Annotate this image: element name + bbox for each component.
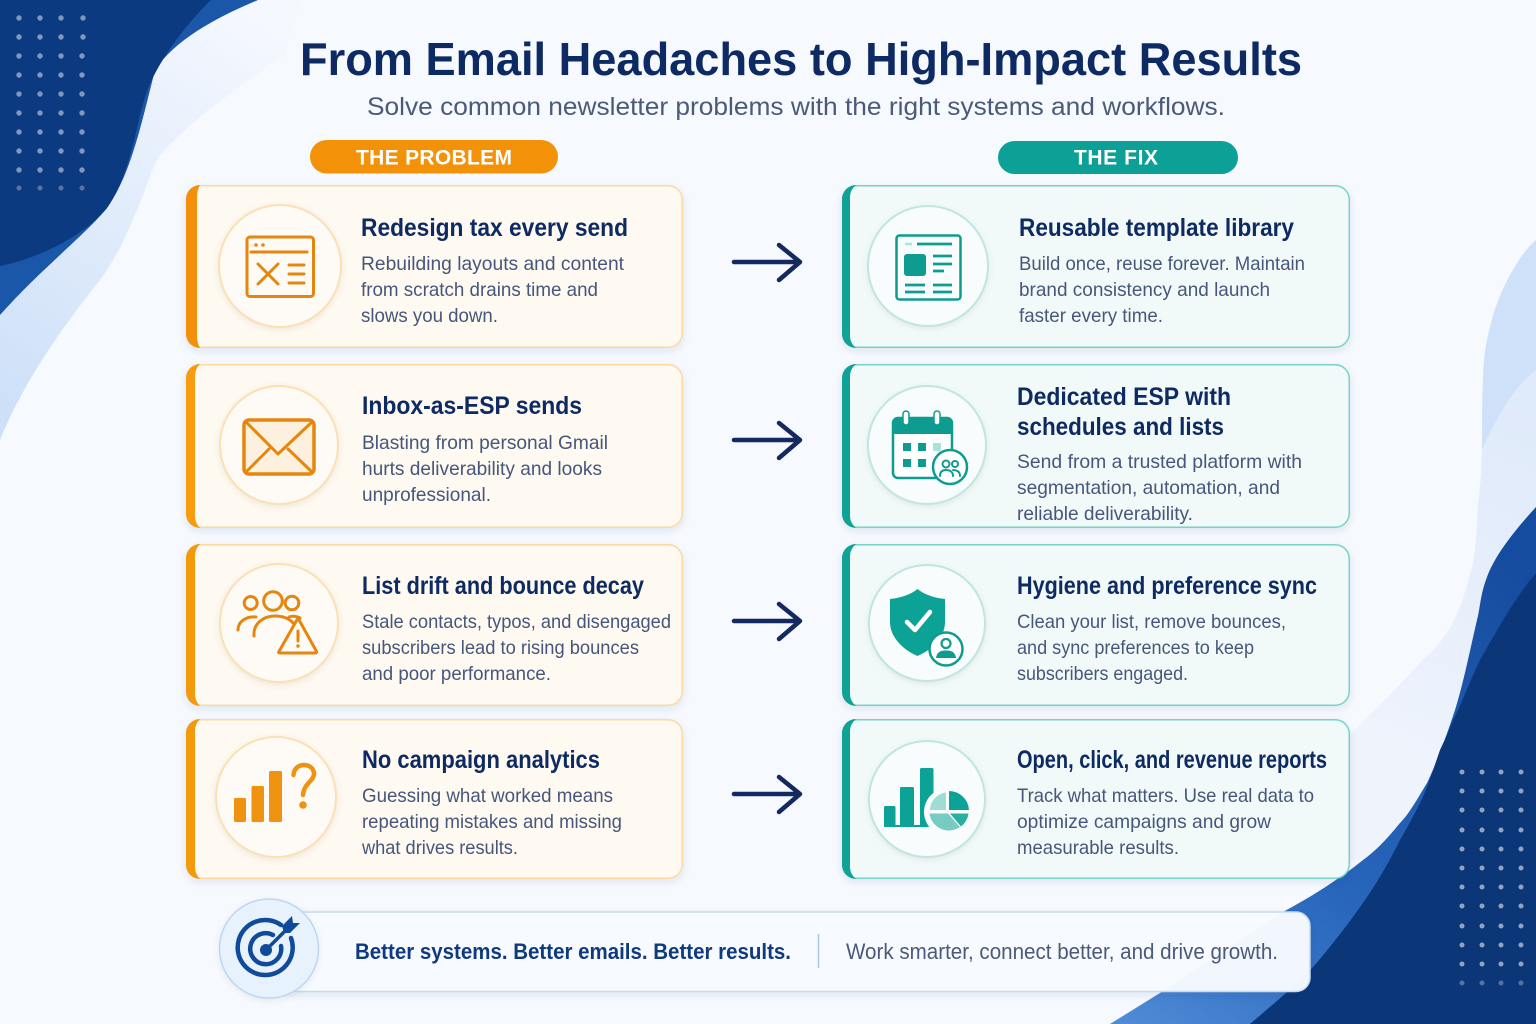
text: fix 3: and sync preferences to keep (1017, 637, 1254, 659)
text: fix 3 (1017, 572, 1317, 685)
text: problem 1: Redesign tax every send (361, 214, 628, 242)
background wave: bottom right (1110, 240, 1536, 1024)
text: fix 1: Build once, reuse forever. Maintain (1019, 253, 1305, 275)
text: problem 3: subscribers lead to rising bounces (362, 637, 639, 659)
text: problem 1: from scratch drains time and (361, 279, 598, 301)
icon: bar chart with pie (869, 741, 985, 857)
text: problem 3: List drift and bounce decay (362, 572, 644, 600)
title: From Email Headaches to High-Impact Results (300, 33, 1302, 85)
text: banner supporting line: Work smarter, connect better, and drive growth. (846, 939, 1278, 964)
icon: layout window with x (219, 205, 341, 327)
text: fix 4: measurable results. (1017, 837, 1179, 859)
panel: problem 2 (186, 364, 682, 528)
text: problem 2: Blasting from personal Gmail (362, 432, 608, 454)
text: problem 2: hurts deliverability and looks (362, 458, 602, 480)
subtitle: Solve common newsletter problems with the right systems and workflows. (367, 93, 1225, 121)
text: fix 4 (1017, 746, 1327, 859)
text: fix 2: reliable deliverability. (1017, 503, 1193, 525)
icon: calendar with people (868, 386, 986, 504)
text: problem 4: what drives results. (361, 837, 518, 859)
text: fix 3: Hygiene and preference sync (1017, 572, 1317, 600)
arrow: row 3 (734, 604, 800, 639)
text: fix 1: faster every time. (1019, 305, 1163, 327)
pill: the problem (310, 140, 558, 174)
panel: problem 1 (186, 185, 682, 348)
text: problem 4: Guessing what worked means (362, 785, 613, 807)
text: problem 2 (362, 392, 608, 506)
pill: the problem: THE PROBLEM (356, 146, 512, 170)
text: problem 1: Rebuilding layouts and content (361, 253, 625, 275)
text: problem 4 (361, 746, 622, 859)
text: problem 2: unprofessional. (362, 484, 491, 506)
text: fix 4: optimize campaigns and grow (1017, 811, 1272, 833)
arrow: row 4 (734, 777, 800, 812)
text: problem 1: slows you down. (361, 305, 498, 327)
text: fix 1: Reusable template library (1019, 214, 1294, 242)
panel: fix 3 (842, 544, 1349, 706)
callout: bottom banner (220, 899, 1310, 998)
panel: problem 4 (186, 719, 682, 879)
panel: fix 1 (842, 185, 1349, 348)
icon: target with arrow (220, 899, 318, 998)
text: fix 3: subscribers engaged. (1017, 663, 1188, 685)
text: problem 3 (362, 572, 671, 685)
dot pattern: top left (16, 15, 86, 190)
panel: fix 4 (842, 719, 1349, 879)
icon: shield with check and person (869, 565, 985, 681)
arrow: row 2 (734, 423, 800, 458)
text: fix 4: Open, click, and revenue reports (1017, 746, 1327, 774)
text: problem 4: No campaign analytics (362, 746, 600, 774)
text: fix 2: schedules and lists (1017, 413, 1224, 441)
background wave: top left (0, 0, 300, 440)
text: fix 4: Track what matters. Use real data to (1017, 785, 1314, 807)
text: fix 2 (1017, 383, 1302, 525)
text: fix 1: brand consistency and launch (1019, 279, 1270, 301)
icon: envelope (220, 386, 338, 504)
text: fix 2: Dedicated ESP with (1017, 383, 1231, 411)
panel: fix 2 (842, 364, 1349, 528)
text: fix 2: Send from a trusted platform with (1017, 451, 1302, 473)
arrow: row 1 (734, 245, 800, 280)
icon: people with warning (220, 564, 338, 682)
text: problem 4: repeating mistakes and missing (362, 811, 622, 833)
icon: bar chart with question mark (216, 737, 336, 857)
text: fix 3: Clean your list, remove bounces, (1017, 611, 1286, 633)
text: fix 2: segmentation, automation, and (1017, 477, 1280, 499)
text: problem 3: and poor performance. (362, 663, 551, 685)
panel: problem 3 (186, 544, 682, 706)
pill: the fix: THE FIX (1074, 146, 1158, 170)
pill: the fix (998, 141, 1238, 174)
text: problem 1 (361, 214, 628, 327)
text: banner statement: Better systems. Better emails. Better results. (355, 939, 791, 964)
text: fix 1 (1019, 214, 1305, 327)
icon: template page (868, 206, 988, 326)
text: problem 3: Stale contacts, typos, and disengaged (362, 611, 671, 633)
dot pattern: bottom right (1460, 770, 1524, 986)
text: problem 2: Inbox-as-ESP sends (362, 392, 582, 420)
